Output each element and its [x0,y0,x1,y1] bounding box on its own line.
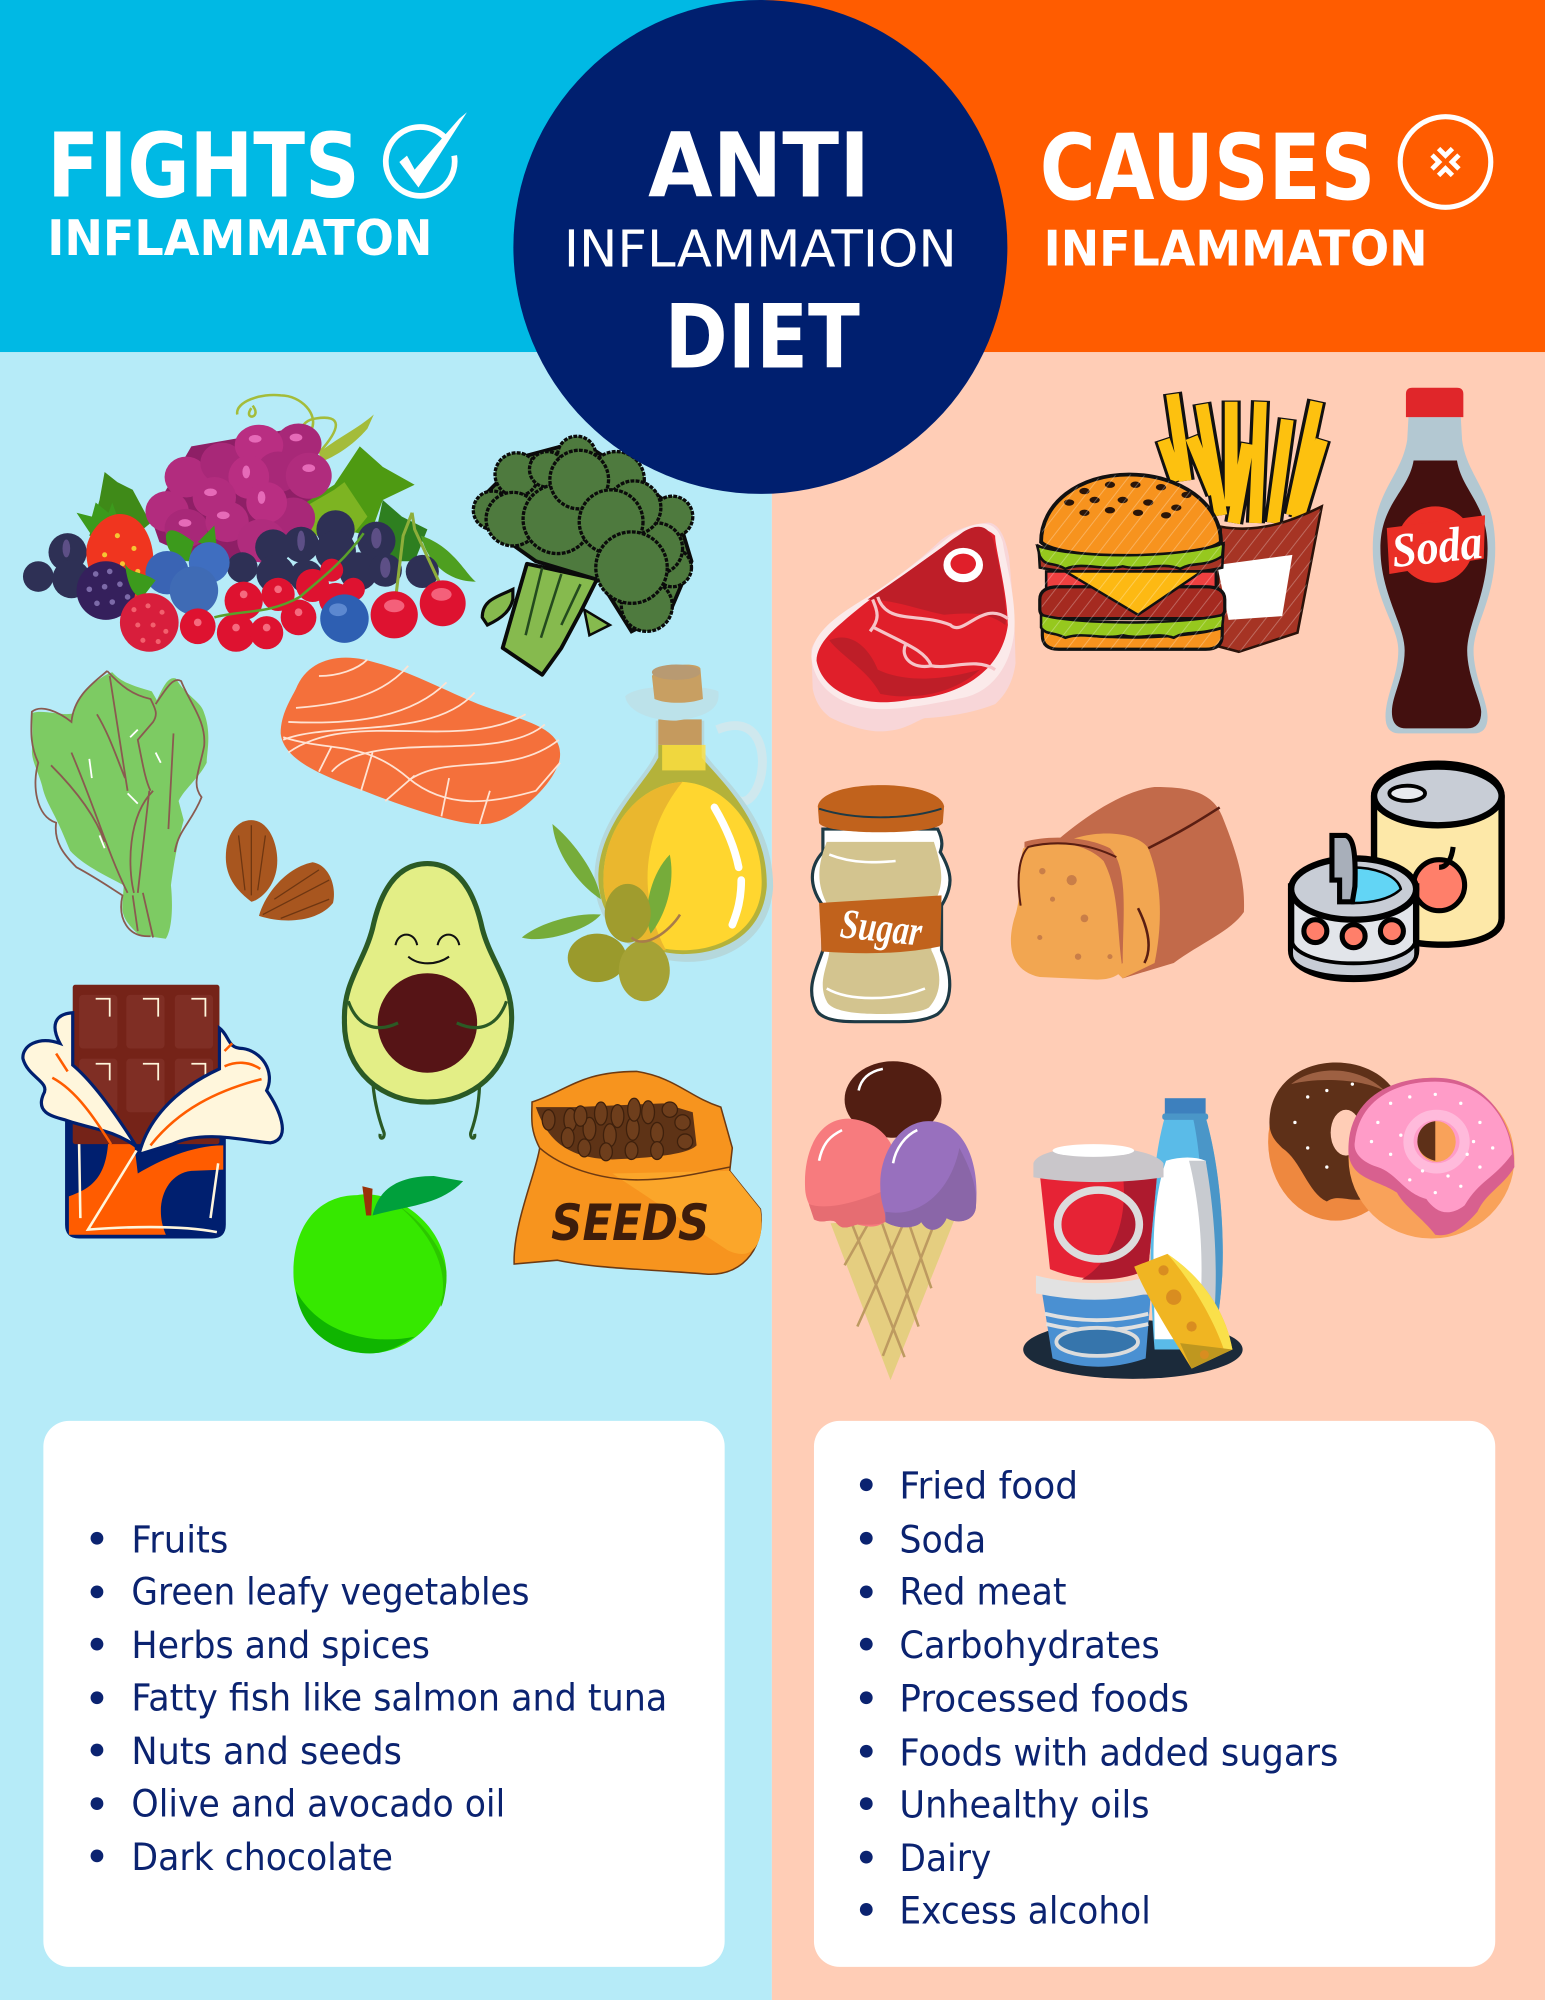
panel: causes foods list: Foods with added sugars [899,1730,1338,1774]
panel: causes foods list [814,1421,1495,1967]
fries box [1215,506,1322,652]
panel: causes foods list: Processed foods [899,1677,1189,1721]
panel: fights foods list: Dark chocolate [131,1835,393,1879]
fries [1164,393,1322,523]
food: olive oil bottle [594,665,773,962]
panel: causes foods list: Red meat [899,1570,1067,1614]
food: soda bottle [1373,388,1495,733]
panel: fights background [0,0,772,2000]
heading: fights inflammation: INFLAMMATON [47,209,432,267]
icon: check mark [386,112,467,196]
food: avocado character [344,864,512,1138]
heading: fights inflammation [47,112,467,267]
icon: cross in circle [1400,117,1491,207]
heading: fights inflammation: FIGHTS [47,114,360,218]
panel: fights foods list: Herbs and spices [131,1623,430,1667]
food: spinach leaves [31,671,208,939]
food: salmon fillet [281,658,560,824]
food: olives [522,824,680,1001]
panel: fights foods list: Green leafy vegetables [131,1570,529,1614]
food: red meat steak [811,523,1016,731]
food: berries and grapes [23,395,476,652]
food: burger and fries [1037,393,1322,652]
food: chocolate bar [23,985,282,1239]
food: soda bottle: Soda [1389,516,1485,578]
title: anti: ANTI [648,114,870,218]
panel: causes foods list: Excess alcohol [899,1888,1151,1932]
heading: causes inflammation: INFLAMMATON [1044,219,1428,277]
food: sugar jar: Sugar [838,900,925,956]
panel: causes foods list: Fried food [899,1464,1078,1508]
food: broccoli [473,436,693,675]
food: seeds bag [514,1071,761,1274]
burger [1037,474,1225,649]
food: canned goods [1291,764,1502,979]
food: bread loaf [1011,787,1244,980]
panel: fights foods list: Nuts and seeds [131,1729,402,1773]
food: seeds bag: SEEDS [551,1194,709,1252]
panel: causes foods list: Dairy [899,1836,991,1880]
panel: fights foods list: Fatty fish like salmon and tuna [131,1675,667,1719]
title: inflammation: INFLAMMATION [564,221,957,280]
food: sugar jar [812,785,950,1022]
heading: causes inflammation [1040,116,1491,277]
heading: causes inflammation: CAUSES [1040,116,1375,221]
food: green apple [293,1176,463,1353]
panel: fights foods list: Fruits [131,1517,228,1561]
panel: causes foods list: Carbohydrates [899,1623,1160,1667]
panel: causes background [765,0,1545,2000]
panel: fights foods list [43,1421,725,1967]
title: diet: DIET [665,285,860,388]
center title circle [513,0,1007,494]
food: dairy and cheese [1023,1098,1243,1379]
food: donuts [1268,1062,1514,1239]
panel: fights foods list: Olive and avocado oil [131,1781,505,1825]
food: almonds [226,820,334,920]
food: ice cream cone [805,1061,977,1380]
panel: causes foods list: Unhealthy oils [899,1783,1150,1827]
panel: causes foods list: Soda [899,1517,986,1561]
